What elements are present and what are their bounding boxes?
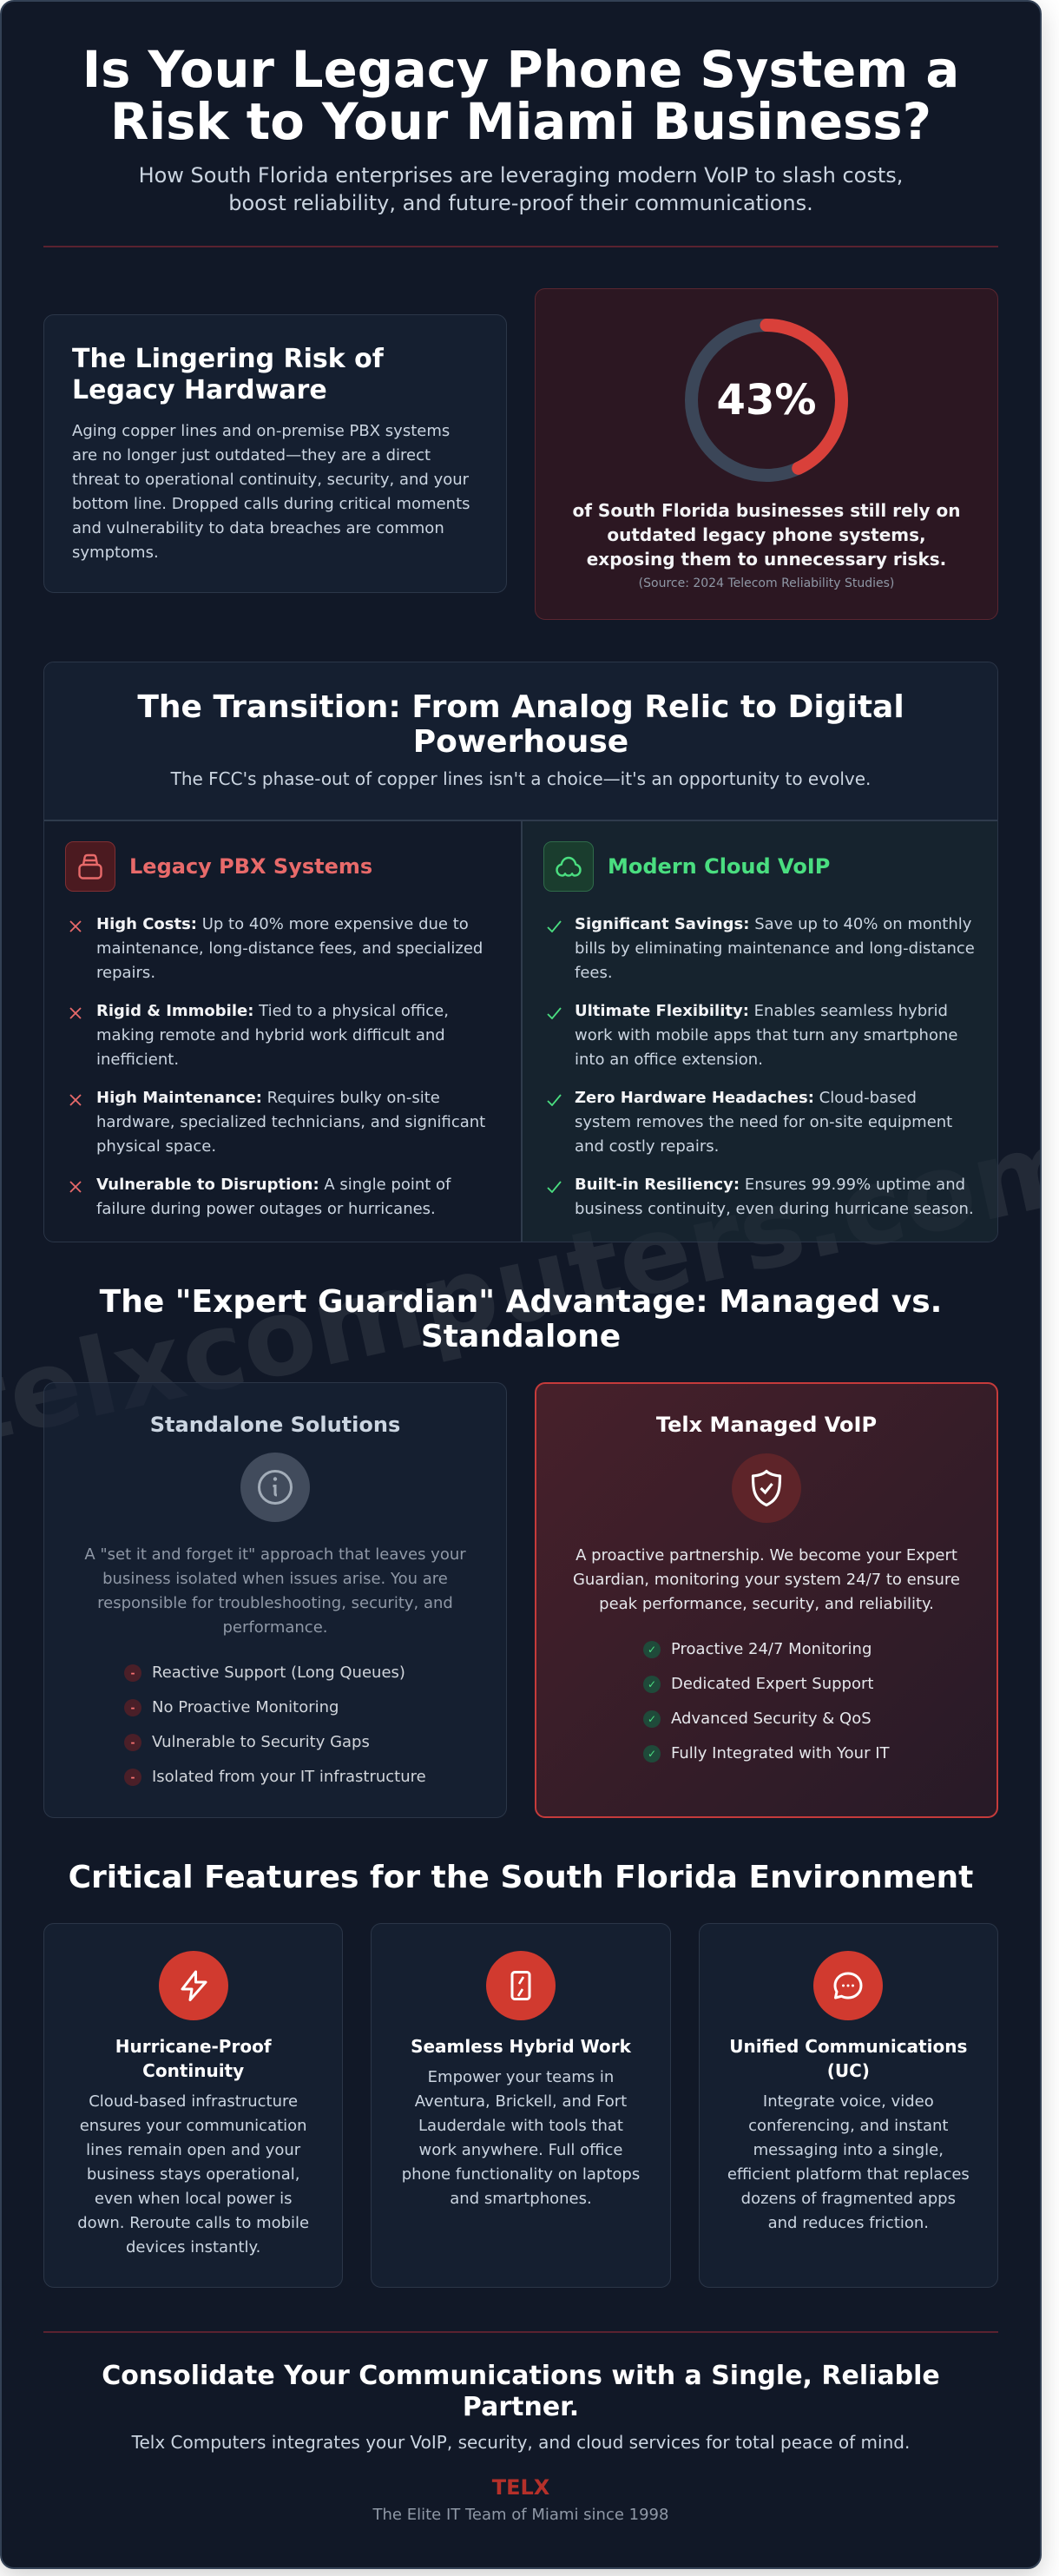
- text: rigid and immobile: [96, 1002, 449, 1069]
- text: vulnerable to disruption: Vulnerable to Disruption: A single point of: [96, 1176, 451, 1194]
- item: integrated: Fully Integrated with Your IT: [671, 1744, 889, 1762]
- text: lingering risk body: bottom line. Dropped calls during critical moments: [72, 495, 470, 513]
- text: unified communications body: messaging into a single,: [753, 2141, 944, 2159]
- text: telx description: [536, 1544, 997, 1617]
- text: zero hardware headaches: [575, 1089, 952, 1156]
- heading: expert guardian: The "Expert Guardian" Advantage: Managed vs.: [100, 1284, 942, 1320]
- text: high maintenance: physical space.: [96, 1137, 216, 1156]
- heading: hurricane-proof: [44, 2034, 342, 2083]
- heading: lingering risk: Legacy Hardware: [72, 375, 327, 405]
- text: unified communications body: [700, 2090, 997, 2236]
- icon: info: [240, 1453, 310, 1522]
- heading: modern cloud VoIP: Modern Cloud VoIP: [608, 854, 830, 879]
- icon: legacy hardware: [65, 841, 115, 892]
- text: ultimate flexibility: work with mobile apps that turn any smartphone: [575, 1026, 957, 1044]
- text: zero hardware headaches: and costly repairs.: [575, 1137, 719, 1156]
- subtitle: How South Florida enterprises are leveraging modern VoIP to slash costs,: [139, 163, 903, 188]
- item: no proactive monitoring: -: [130, 1702, 135, 1714]
- text: high maintenance: hardware, specialized technicians, and significant: [96, 1113, 485, 1131]
- text: significant savings: Significant Savings: Save up to 40% on monthly: [575, 915, 971, 933]
- item: rigid and immobile: [69, 1002, 449, 1069]
- text: high costs: repairs.: [96, 964, 155, 982]
- text: seamless hybrid body: and smartphones.: [450, 2190, 592, 2208]
- list: telx benefits: [643, 1637, 990, 1766]
- text: high maintenance: High Maintenance: Requires bulky on-site: [96, 1089, 440, 1107]
- heading: lingering risk: The Lingering Risk of: [72, 344, 384, 374]
- text: seamless hybrid body: Empower your teams in: [428, 2068, 614, 2086]
- text: standalone description: A "set it and forget it" approach that leaves your: [84, 1545, 466, 1564]
- text: hurricane-proof body: devices instantly.: [126, 2238, 260, 2256]
- icon: bolt: [159, 1951, 228, 2020]
- text: hurricane-proof body: down. Reroute calls to mobile: [77, 2214, 309, 2232]
- text: statistic description: of South Florida businesses still rely on: [573, 500, 960, 521]
- text: vulnerable to disruption: [96, 1176, 451, 1218]
- icon: check: [547, 1007, 562, 1019]
- item: security: Advanced Security & QoS: [671, 1710, 872, 1728]
- text: rigid and immobile: Rigid & Immobile: Tied to a physical office,: [96, 1002, 449, 1020]
- text: standalone description: performance.: [222, 1618, 328, 1637]
- icon: phone: [486, 1951, 556, 2020]
- text: hurricane-proof body: ensures your communication: [80, 2117, 307, 2135]
- panel: seamless hybrid work: [371, 1923, 671, 2288]
- text: standalone description: responsible for troubleshooting, security, and: [97, 1594, 453, 1612]
- item: monitoring: [643, 1637, 990, 1662]
- text: seamless hybrid body: [372, 2065, 670, 2211]
- heading: expert guardian: [99, 1284, 942, 1354]
- text: seamless hybrid body: work anywhere. Full office: [418, 2141, 622, 2159]
- item: security gaps: Vulnerable to Security Gaps: [152, 1733, 370, 1751]
- text: zero hardware headaches: system removes the need for on-site equipment: [575, 1113, 952, 1131]
- text: unified communications body: and reduces friction.: [768, 2214, 929, 2232]
- item: monitoring: Proactive 24/7 Monitoring: [671, 1640, 872, 1658]
- item: significant savings: [547, 915, 975, 982]
- panel: standalone solutions: [43, 1382, 507, 1818]
- panel: unified communications: [699, 1923, 998, 2288]
- heading: consolidate: Consolidate Your Communications with a Single, Reliable: [102, 2361, 940, 2391]
- icon: cross: [69, 1181, 82, 1193]
- text: lingering risk body: and vulnerability to data breaches are common: [72, 519, 444, 537]
- heading: hurricane-proof: Continuity: [142, 2060, 244, 2081]
- chart: 43 percent ring: [685, 319, 848, 482]
- text: ultimate flexibility: into an office extension.: [575, 1051, 763, 1069]
- panel: the transition: [43, 662, 998, 1242]
- heading: expert guardian: Standalone: [421, 1319, 621, 1354]
- text: standalone description: business isolated when issues arise. You are: [102, 1570, 448, 1588]
- text: telx description: A proactive partnership. We become your Expert: [576, 1546, 957, 1565]
- item: isolated: Isolated from your IT infrastructure: [152, 1768, 426, 1786]
- heading: telx managed: Telx Managed VoIP: [656, 1413, 877, 1437]
- heading: lingering risk: [72, 344, 384, 405]
- heading: transition: Powerhouse: [413, 724, 628, 760]
- heading: hurricane-proof: Hurricane-Proof: [115, 2036, 272, 2057]
- heading: consolidate: Partner.: [463, 2392, 579, 2422]
- text: statistic description: [573, 500, 960, 570]
- text: high costs: maintenance, long-distance fees, and specialized: [96, 939, 483, 958]
- text: unified communications body: Integrate voice, video: [763, 2092, 934, 2111]
- item: integrated: ✓: [648, 1748, 656, 1760]
- item: reactive support: Reactive Support (Long Queues): [152, 1664, 405, 1682]
- number: 43 percent: 43%: [717, 376, 816, 425]
- heading: transition: [137, 689, 904, 760]
- text: hurricane-proof body: Cloud-based infrastructure: [89, 2092, 298, 2111]
- item: isolated: [124, 1765, 471, 1789]
- item: security: [643, 1707, 990, 1731]
- icon: cross: [69, 1094, 82, 1106]
- item: built-in resiliency: [547, 1176, 974, 1218]
- item: high maintenance: [69, 1089, 485, 1156]
- heading: consolidate: [43, 2361, 998, 2423]
- title: [82, 41, 959, 151]
- panel: 43 percent statistic: [535, 288, 998, 620]
- text: hurricane-proof body: even when local power is: [95, 2190, 292, 2208]
- footer: [43, 2346, 998, 2537]
- subtitle: boost reliability, and future-proof their communications.: [228, 191, 813, 215]
- heading: legacy PBX: Legacy PBX Systems: [129, 854, 372, 879]
- text: hurricane-proof body: lines remain open and your: [86, 2141, 300, 2159]
- item: security gaps: -: [130, 1736, 135, 1749]
- text: footer subtitle: Telx Computers integrates your VoIP, security, and cloud services for total peace of mind.: [132, 2432, 910, 2453]
- text: zero hardware headaches: Zero Hardware Headaches: Cloud-based: [575, 1089, 917, 1107]
- text: built-in resiliency: Built-in Resiliency: Ensures 99.99% uptime and: [575, 1176, 965, 1194]
- column: modern cloud VoIP: [523, 821, 997, 1242]
- text: unified communications body: efficient platform that replaces: [727, 2165, 970, 2184]
- text: standalone description: [84, 1545, 466, 1637]
- item: no proactive monitoring: No Proactive Monitoring: [152, 1698, 339, 1716]
- text: tagline: The Elite IT Team of Miami since 1998: [373, 2506, 668, 2524]
- icon: check: [547, 1181, 562, 1193]
- text: lingering risk body: Aging copper lines and on-premise PBX systems: [72, 422, 450, 440]
- text: high costs: High Costs: Up to 40% more expensive due to: [96, 915, 469, 933]
- panel: hurricane-proof continuity: [43, 1923, 343, 2288]
- panel: telx managed VoIP: [535, 1382, 998, 1818]
- item: reactive support: -: [130, 1667, 135, 1679]
- item: high costs: [69, 915, 483, 982]
- text: rigid and immobile: inefficient.: [96, 1051, 179, 1069]
- heading: unified communications: [700, 2034, 997, 2083]
- text: seamless hybrid body: Lauderdale with tools that: [418, 2117, 623, 2135]
- text: hurricane-proof body: [44, 2090, 342, 2260]
- panel: lingering risk: [43, 314, 507, 593]
- item: isolated: -: [130, 1771, 135, 1783]
- transition header: [44, 662, 997, 821]
- text: ultimate flexibility: [575, 1002, 957, 1069]
- text: vulnerable to disruption: failure during power outages or hurricanes.: [96, 1200, 436, 1218]
- brand: TELX: TELX: [492, 2475, 549, 2500]
- list: standalone drawbacks: [124, 1664, 426, 1786]
- text: built-in resiliency: business continuity, even during hurricane season.: [575, 1200, 974, 1218]
- item: expert support: [643, 1672, 990, 1696]
- icon: cloud: [543, 841, 594, 892]
- text: source: (Source: 2024 Telecom Reliability Studies): [639, 576, 894, 590]
- icon: cross: [69, 1007, 82, 1019]
- text: seamless hybrid body: phone functionality on laptops: [402, 2165, 640, 2184]
- text: high costs: [96, 915, 483, 982]
- text: telx description: peak performance, security, and reliability.: [599, 1595, 934, 1613]
- icon: check: [547, 920, 562, 932]
- text: lingering risk body: [72, 422, 470, 562]
- text: ultimate flexibility: Ultimate Flexibility: Enables seamless hybrid: [575, 1002, 948, 1020]
- text: seamless hybrid body: Aventura, Brickell, and Fort: [415, 2092, 627, 2111]
- text: built-in resiliency: [575, 1176, 974, 1218]
- text: unified communications body: conferencing, and instant: [748, 2117, 948, 2135]
- icon: cross: [69, 920, 82, 932]
- heading: critical features: Critical Features for the South Florida Environment: [69, 1860, 973, 1895]
- heading: unified communications: (UC): [827, 2060, 870, 2081]
- text: significant savings: fees.: [575, 964, 613, 982]
- text: high maintenance: [96, 1089, 485, 1156]
- icon: shield: [732, 1453, 801, 1523]
- subtitle: [139, 163, 903, 215]
- icon: check: [547, 1094, 562, 1106]
- text: hurricane-proof body: business stays operational,: [87, 2165, 299, 2184]
- title: Is Your Legacy Phone System a: [82, 41, 959, 99]
- text: rigid and immobile: making remote and hybrid work difficult and: [96, 1026, 445, 1044]
- text: statistic description: outdated legacy phone systems,: [607, 524, 926, 545]
- item: expert support: Dedicated Expert Support: [671, 1675, 873, 1693]
- text: transition subtitle: The FCC's phase-out of copper lines isn't a choice—it's an opportunity to evolve.: [171, 768, 871, 789]
- text: lingering risk body: are no longer just outdated—they are a direct: [72, 446, 431, 464]
- heading: standalone: Standalone Solutions: [150, 1413, 400, 1437]
- text: statistic description: exposing them to unnecessary risks.: [587, 549, 946, 570]
- title: Risk to Your Miami Business?: [110, 93, 931, 151]
- heading: seamless hybrid: Seamless Hybrid Work: [411, 2036, 631, 2057]
- column: legacy PBX: [44, 821, 521, 1242]
- item: expert support: ✓: [648, 1678, 656, 1690]
- heading: unified communications: Unified Communications: [729, 2036, 967, 2057]
- text: lingering risk body: symptoms.: [72, 544, 159, 562]
- item: vulnerable to disruption: [69, 1176, 451, 1218]
- item: monitoring: ✓: [648, 1644, 656, 1656]
- text: telx description: Guardian, monitoring your system 24/7 to ensure: [573, 1571, 960, 1589]
- item: integrated: [643, 1742, 990, 1766]
- text: significant savings: [575, 915, 975, 982]
- heading: transition: The Transition: From Analog Relic to Digital: [137, 689, 904, 725]
- item: ultimate flexibility: [547, 1002, 957, 1069]
- item: zero hardware headaches: [547, 1089, 952, 1156]
- text: significant savings: bills by eliminating maintenance and long-distance: [575, 939, 975, 958]
- text: lingering risk body: threat to operational continuity, security, and your: [72, 471, 469, 489]
- icon: chat: [813, 1951, 883, 2020]
- text: unified communications body: dozens of fragmented apps: [741, 2190, 956, 2208]
- item: security: ✓: [648, 1713, 656, 1725]
